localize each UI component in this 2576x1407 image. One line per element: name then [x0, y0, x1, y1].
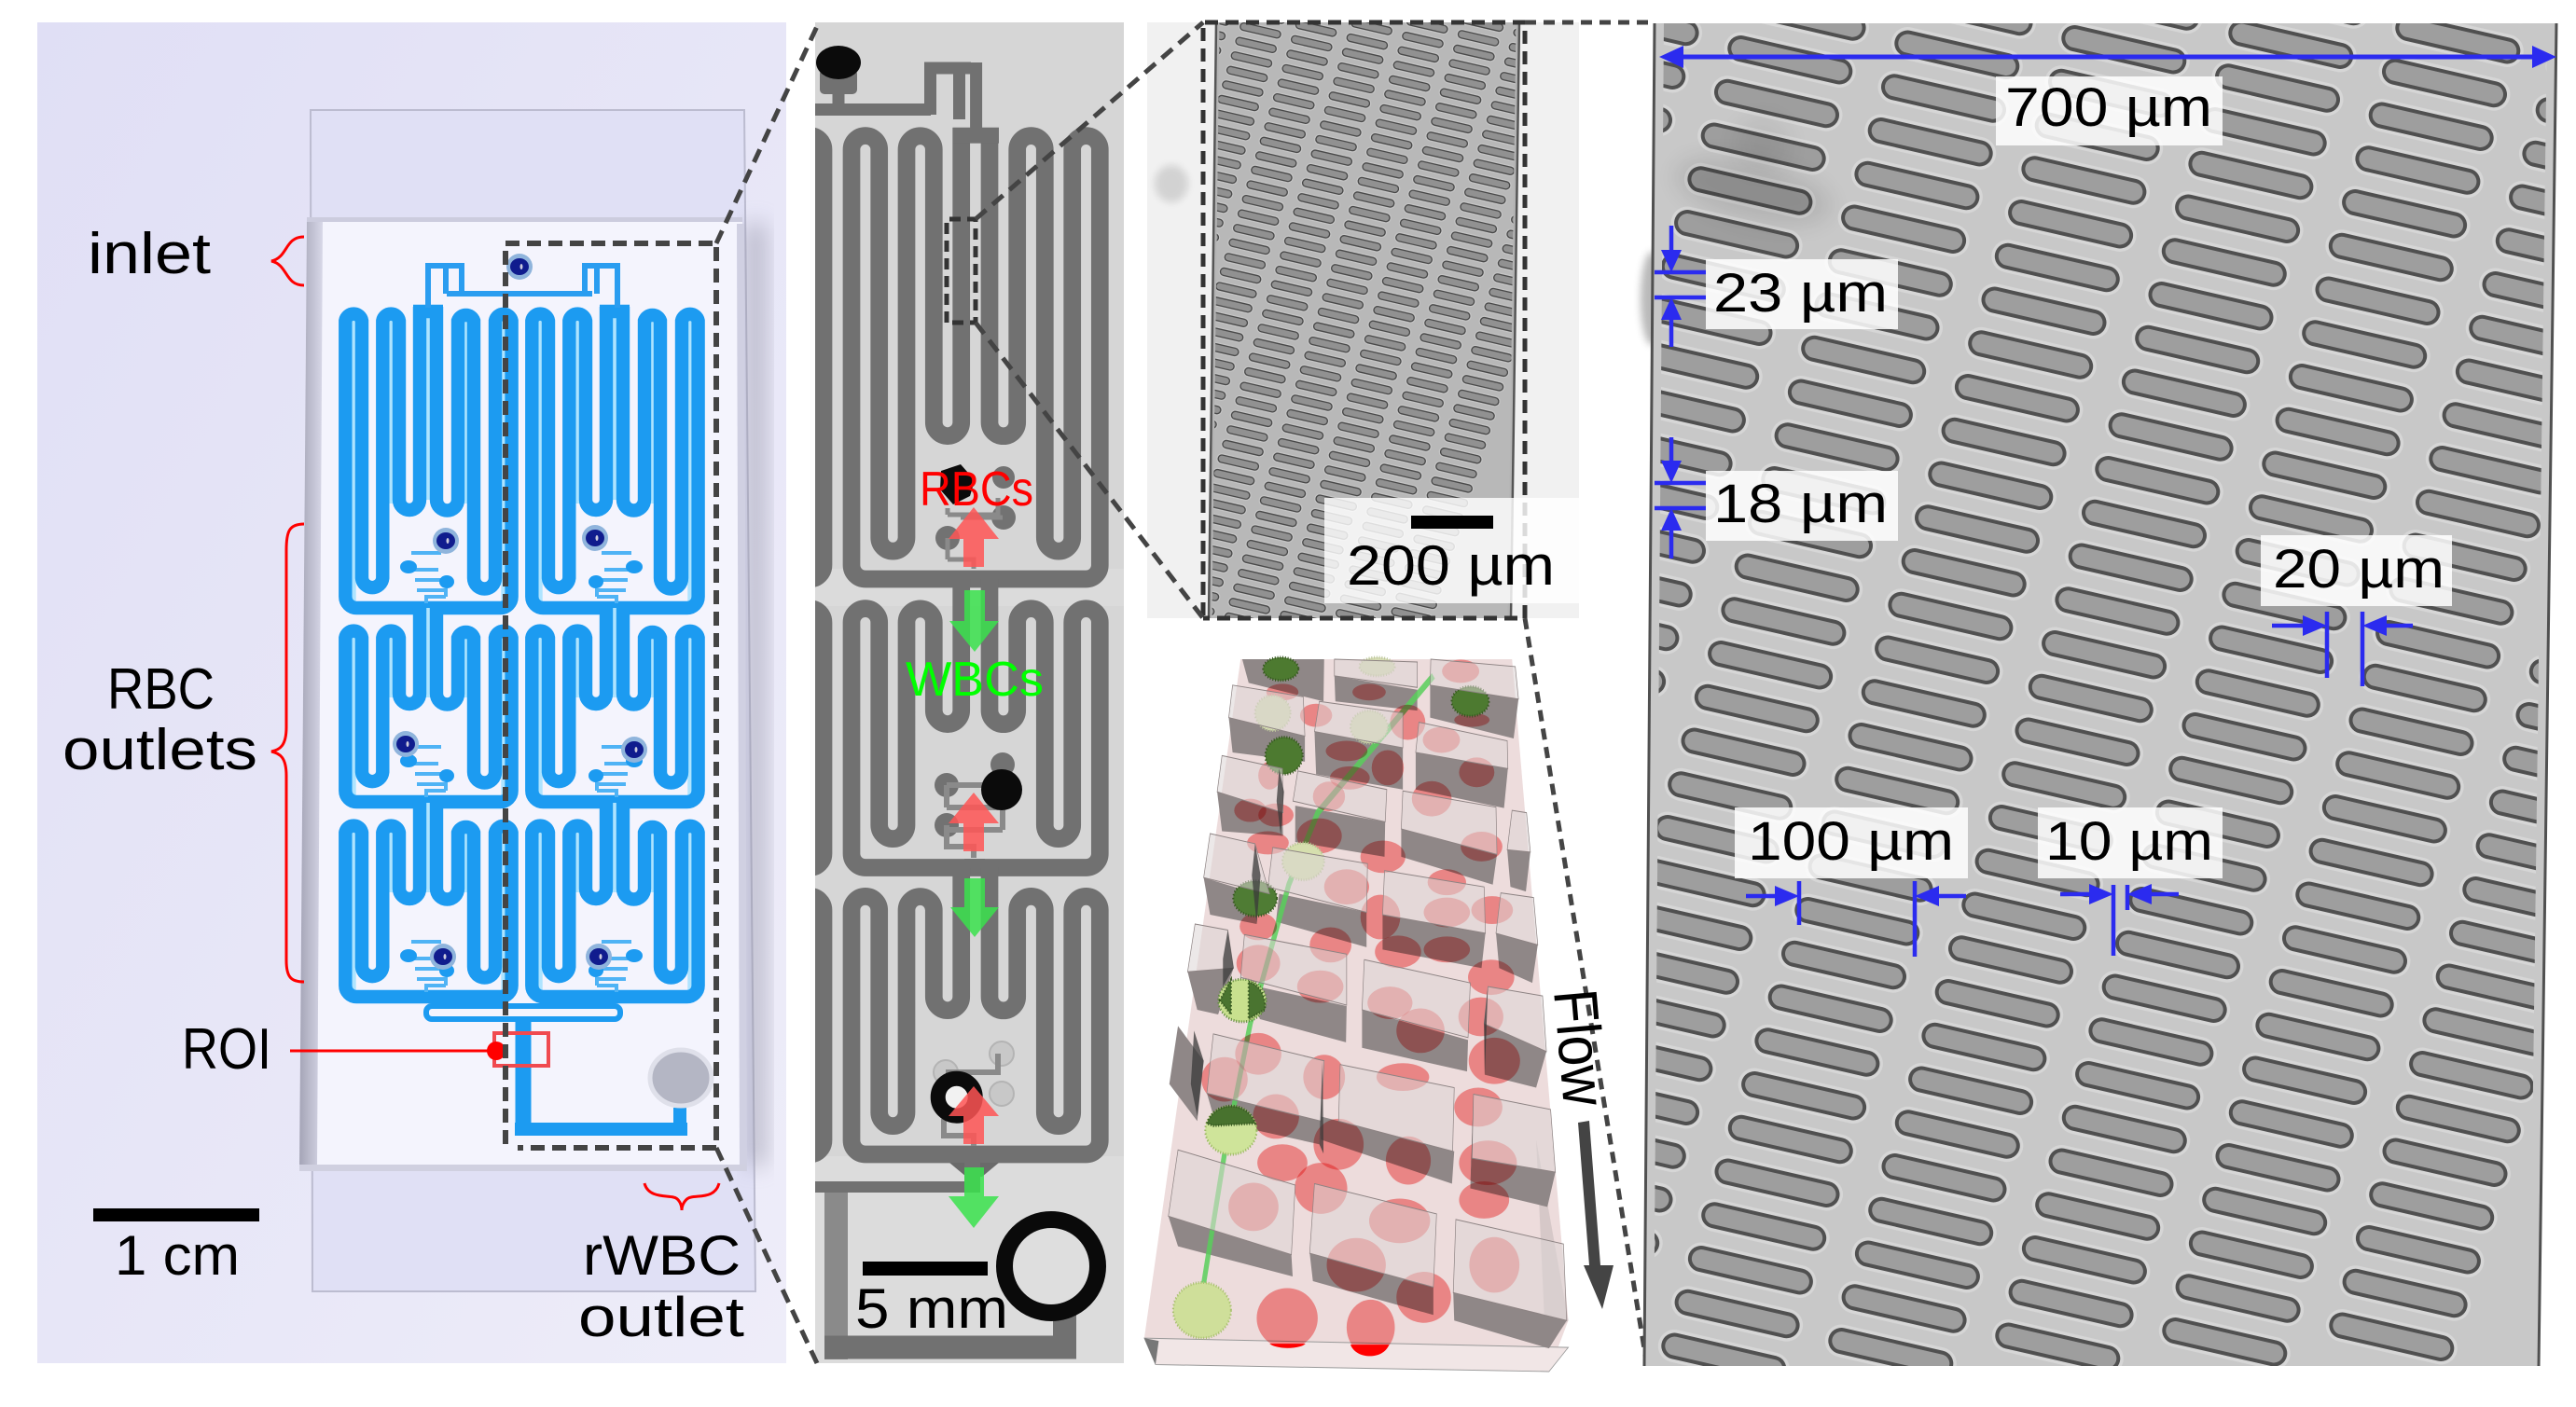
scale bar: 1 cm [93, 1208, 259, 1287]
label: RBCs: RBCs [920, 462, 1033, 517]
faded outlet widget (tier 3) [934, 1041, 1014, 1146]
bracket: rWBC outlet [644, 1183, 719, 1210]
black ink spot at inlet [816, 46, 861, 79]
dashed zoom box [1203, 22, 1525, 618]
dashed zoom box [506, 243, 716, 1148]
label: rWBC outlet: outlet [578, 1286, 744, 1348]
dimension: 18 µm [1655, 437, 1898, 559]
pillar front faces [1169, 659, 1567, 1348]
dimension: 20 µm: 20 µm [2273, 539, 2444, 600]
PDMS chip [299, 217, 747, 1171]
icon: inlet and outlet ports [393, 254, 647, 970]
zoom lines from device photo to grey micrograph [716, 22, 819, 1363]
grey serpentine channels [796, 62, 1100, 1359]
bracket: RBC outlets [271, 524, 304, 982]
dimension: 20 µm [2261, 535, 2452, 686]
zoom lines from grey micrograph to channel micrograph [976, 22, 1203, 618]
scale label: 200 µm: 200 µm [1347, 534, 1555, 597]
dimension: 10 µm [2038, 807, 2223, 956]
bright red cell crescents [1269, 1344, 1389, 1356]
green WBC trajectory [1204, 676, 1433, 1283]
channel floor [1144, 659, 1568, 1372]
scale label: 200 µm [1324, 498, 1579, 603]
icon: rWBC outlet ring [1004, 1220, 1098, 1313]
scale bar: 1 cm: 1 cm [115, 1224, 240, 1287]
dimension: 100 µm: 100 µm [1748, 811, 1954, 872]
dashed region of interest [947, 219, 976, 323]
label: RBC outlets: RBC [107, 657, 215, 722]
panel: channel micrograph with pillars [1147, 21, 1579, 621]
label: RBC outlets: outlets [62, 718, 257, 782]
dimension: 23 µm [1655, 226, 1898, 347]
label: Flow: Flow [1541, 986, 1620, 1109]
panel: photograph of the device [37, 22, 786, 1363]
dimension: 700 µm: 700 µm [2005, 77, 2212, 138]
dimension: 100 µm [1735, 807, 1968, 957]
label: rWBC outlet [578, 1224, 744, 1348]
black ink spots at RBC outlets [938, 464, 1022, 1116]
panel: pillar detail micrograph with dimensions [1636, 23, 2557, 1366]
red blood cells [1201, 659, 1520, 1356]
dimension: 700 µm [1659, 46, 2556, 145]
panel: greyscale micrograph of the half device [796, 22, 1124, 1363]
ROI marker [290, 1033, 548, 1066]
white blood cells [1173, 657, 1489, 1338]
dimension: 18 µm: 18 µm [1713, 474, 1888, 534]
dark pillar side slivers [1191, 768, 1488, 1188]
outlet widgets [935, 466, 1016, 858]
label: rWBC outlet: rWBC [583, 1224, 741, 1287]
dimension: 10 µm: 10 µm [2045, 811, 2213, 872]
label: WBCs: WBCs [906, 653, 1044, 707]
pillar top faces [1169, 659, 1567, 1320]
label: ROI: ROI [182, 1017, 271, 1082]
scale bar: 5 mm: 5 mm [855, 1277, 1008, 1340]
arrows: RBC flow (red) [949, 507, 999, 1144]
glass slide [311, 110, 765, 1291]
bracket: inlet [271, 237, 304, 285]
arrow: flow direction [1578, 1121, 1613, 1309]
label: RBC outlets [62, 657, 257, 782]
arrows: WBC flow (green) [949, 590, 999, 1228]
icon: rWBC outlet hole [650, 1050, 712, 1106]
blue serpentine channels [345, 266, 699, 1136]
label: inlet: inlet [88, 222, 211, 286]
zoom lines from channel micrograph to detail panel [1525, 22, 1653, 1366]
panel: 3D schematic of the DLD pillars with cells [1144, 657, 1568, 1372]
dimension: 23 µm: 23 µm [1713, 263, 1888, 324]
